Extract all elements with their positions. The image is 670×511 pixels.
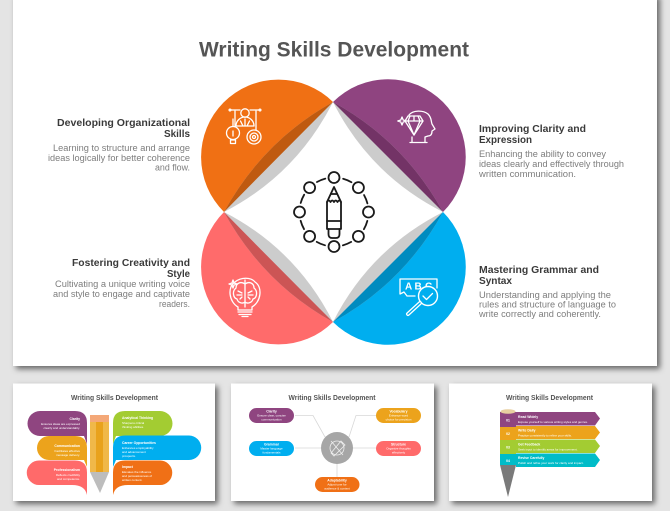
text: fostering creativity: and style to engage and captivate [53,289,190,299]
text: developing organizational skills [48,117,190,172]
text: fostering creativity: Style [167,268,190,280]
icon: brain bulb [229,278,260,316]
pill: structure: Organize thoughts [386,446,411,450]
pencil body: 03 [506,446,510,450]
icon: grammar magnifier: A [405,282,412,292]
text: improving clarity [478,123,624,179]
icon: diamond head [398,111,435,142]
bubble: clarity [27,411,87,444]
text: mastering grammar: write correctly and coherently. [478,309,601,319]
bubble: communication: Facilitates effective [55,449,80,453]
pencil body [500,409,516,497]
text: improving clarity: written communication. [478,169,576,179]
bubble: professionalism: Reflects credibility [56,473,80,477]
panel: thumbnail 3 pencil steps [449,384,652,501]
pill: grammar: Master language [260,446,283,450]
pill: clarity: Ensure clear, concise [257,414,286,418]
pencil body: 04 [506,459,510,463]
pill: structure [376,441,421,456]
pill: vocabulary [376,408,421,423]
text: mastering grammar: rules and structure of language to [479,300,616,310]
heading: Writing Skills Development [71,395,159,402]
pill: grammar: Grammar [264,442,280,446]
pill: grammar [249,441,294,456]
pill: adaptability: Adjust tone for [327,482,347,486]
pencil body: 01 [506,418,510,422]
text: developing organizational skills: Learning to structure and arrange [53,143,190,153]
pill: adaptability: Adaptability [327,478,347,482]
bubble: analytical thinking [113,411,172,444]
text: mastering grammar [478,264,616,319]
petal: coral [201,212,333,344]
bubble: career opportunities: and advancement [122,450,146,454]
text: fostering creativity: Fostering Creativity and [72,257,190,269]
arrow: revise carefully: Polish and refine your work for clarity and impact. [518,461,584,465]
arrow: read widely: Read Widely [518,415,538,419]
pill: clarity [249,408,294,423]
bubble: career opportunities [113,436,201,467]
text: mastering grammar: Syntax [479,275,512,287]
pill: vocabulary: Enhance word [389,414,408,418]
bubble: career opportunities: Enhances employability [122,446,154,450]
bubble: impact: Elevates the influence [122,470,152,474]
pencil body: 02 [506,432,510,436]
bubble: analytical thinking: thinking abilities. [122,425,144,429]
arrow: get feedback [516,440,600,453]
icon: organizational skills [226,109,261,144]
pill: structure: effectively [392,450,406,454]
text: developing organizational skills: ideas logically for better coherence [48,153,190,163]
text: fostering creativity: Cultivating a unique writing voice [55,279,190,289]
connectors [295,416,376,477]
bubble: analytical thinking: Sharpens critical [122,421,145,425]
panel: thumbnail 2 hub diagram [231,384,434,501]
text: improving clarity: ideas clearly and effectively through [479,159,624,169]
petal: orange [201,80,333,212]
bubble: clarity: clearly and understandably. [44,426,80,430]
bubble: analytical thinking: Analytical Thinking [122,416,153,420]
text: mastering grammar: Understanding and applying the [479,290,611,300]
bubble: communication: Communication [54,444,80,448]
bubble: communication: message delivery. [56,453,80,457]
bubble: career opportunities: prospects. [122,454,136,458]
text: fostering creativity [53,257,190,309]
text: improving clarity: Improving Clarity and [479,123,586,135]
arrow: write daily [516,426,600,439]
heading: Writing Skills Development [506,395,594,402]
text: developing organizational skills: Developing Organizational [57,117,190,129]
bubble: professionalism: Professionalism [54,468,80,472]
panel: main slide [13,0,657,366]
arrow: read widely: Expose yourself to various writing styles and genres. [518,420,588,424]
text: improving clarity: Enhancing the ability to convey [479,149,606,159]
arrow: revise carefully: Revise Carefully [518,456,544,460]
pill: vocabulary: Vocabulary [389,410,408,414]
hub [321,432,353,464]
bubble: impact [113,460,172,495]
bubble: career opportunities: Career Opportunities [122,441,156,445]
pill: adaptability [315,477,360,492]
petal: purple [333,79,466,212]
pill: clarity: Clarity [266,410,277,414]
bubble: communication [37,436,87,467]
bubble: professionalism: and competence. [57,477,80,481]
pill: clarity: communication [261,418,282,422]
pencil [90,415,109,493]
text: developing organizational skills: Skills [164,128,190,140]
arrow: write daily: Write Daily [518,428,536,432]
bubble: impact: Impact [122,465,134,469]
bubble: impact: and persuasiveness of [122,474,152,478]
heading: Writing Skills Development [288,395,376,402]
bubble: clarity: Clarity [69,417,80,421]
title: Writing Skills Development [199,38,469,62]
icon: grammar magnifier: C [425,282,432,292]
icon: grammar magnifier [400,279,438,314]
text: mastering grammar: Mastering Grammar and [479,264,599,276]
bubble: impact: written content. [122,478,143,482]
arrow: get feedback: Seek input to identify areas for improvement. [518,448,578,452]
bubble: clarity: Ensures ideas are expressed [41,422,80,426]
icon: grammar magnifier: B [414,282,422,292]
arrow: read widely [516,412,600,426]
text: developing organizational skills: and flow. [155,162,190,172]
arrow: revise carefully [516,454,600,467]
icon: central pencil with ring of nodes [294,172,374,252]
text: improving clarity: Expression [479,134,532,146]
pill: structure: Structure [391,442,406,446]
petal: blue [333,212,466,345]
arrow: write daily: Practice consistently to refine your skills. [518,434,572,438]
pill: grammar: fundamentals [262,450,281,454]
text: fostering creativity: readers. [159,299,190,309]
panel: thumbnail 1 pencil bubbles [13,384,215,501]
pill: adaptability: audience & context [324,486,350,490]
bubble: professionalism [27,460,87,495]
pill: vocabulary: choice for precision [386,418,412,422]
arrow: get feedback: Get Feedback [518,442,540,446]
